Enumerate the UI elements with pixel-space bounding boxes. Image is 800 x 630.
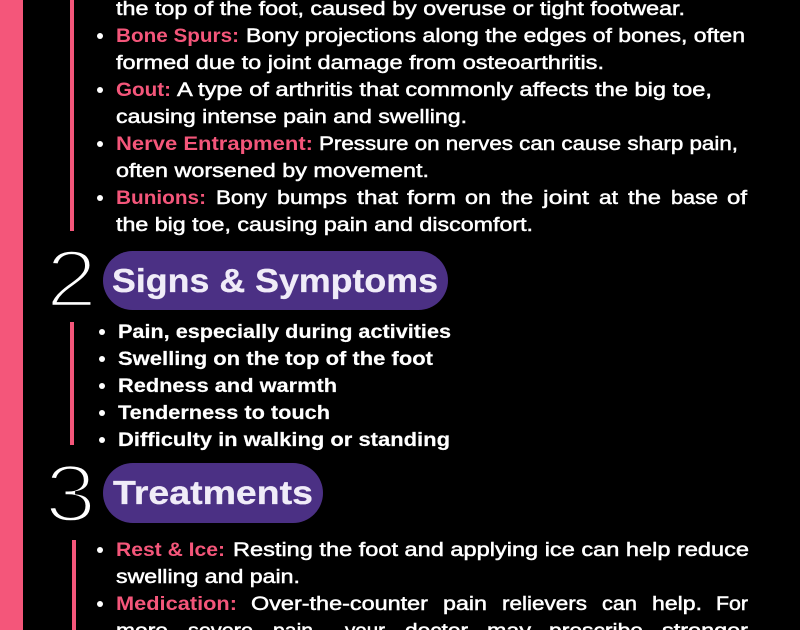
list item: bunions: joint [542, 187, 590, 209]
list item: swelling: Swelling on the top of the foot [118, 348, 434, 370]
list item: rest and ice: swelling and pain. [116, 566, 300, 588]
list item: difficulty walking: Difficulty in walking or standing [118, 429, 450, 451]
heading pill [103, 251, 448, 310]
list item: bunions: the [628, 187, 661, 209]
list item: bunions: of [727, 187, 748, 209]
list item: gout: causing intense pain and swelling. [116, 106, 467, 128]
list item: bunions: at [599, 187, 619, 209]
list item: rest and ice: Rest & Ice: [116, 539, 225, 561]
list item: medication: Over-the-counter [251, 593, 429, 615]
list item: bone spurs: formed due to joint damage from osteoarthritis. [116, 52, 604, 74]
list item: bunions: bumps [277, 187, 347, 209]
list item: pain: Pain, especially during activities [118, 321, 451, 343]
list item: bunions: the [501, 187, 533, 209]
list item: rest and ice: Resting the foot and applying ice can help reduce [233, 539, 749, 561]
list item: medication: can [602, 593, 637, 615]
heading text: Signs & Symptoms [112, 262, 438, 299]
list item: nerve entrapment: often worsened by movement. [116, 160, 429, 182]
list item: medication: For [716, 593, 749, 615]
panel: causes list [70, 0, 748, 236]
list item: nerve entrapment: Nerve Entrapment: [116, 133, 313, 155]
list item: bone spurs: Bony projections along the edges of bones, often [246, 25, 745, 47]
list item: rest and ice [97, 539, 749, 588]
left accent band [0, 0, 23, 630]
number 3: 3 [45, 449, 96, 539]
section heading: signs and symptoms [46, 234, 448, 324]
list item: bunions: Bunions: [116, 187, 206, 209]
list item: bunions: the big toe, causing pain and discomfort. [116, 214, 533, 236]
list item: tenderness: Tenderness to touch [118, 402, 330, 424]
list item: bunions: Bony [216, 187, 267, 209]
heading pill [103, 463, 323, 523]
list item: medication [97, 593, 749, 630]
list item: bone spurs: Bone Spurs: [116, 25, 239, 47]
list item: medication: relievers [502, 593, 587, 615]
list item: bunions [97, 187, 748, 236]
panel: symptoms list [70, 321, 451, 451]
list item: bunions: that [357, 187, 399, 209]
list item: nerve entrapment [97, 133, 738, 182]
causes timeline rail [70, 0, 74, 231]
list item: bunions: form [407, 187, 456, 209]
list item: nerve entrapment: Pressure on nerves can cause sharp pain, [319, 133, 738, 155]
list item: gout: A type of arthritis that commonly affects the big toe, [177, 79, 712, 101]
list item: gout [97, 79, 712, 128]
section heading: treatments [45, 449, 323, 539]
list item: bunions: on [465, 187, 491, 209]
list item: redness: Redness and warmth [118, 375, 337, 397]
list item: gout: Gout: [116, 79, 171, 101]
number 2: 2 [46, 234, 97, 324]
heading text: Treatments [113, 474, 313, 511]
list item: medication: Medication: [116, 593, 237, 615]
list item: medication: help. [652, 593, 702, 615]
panel: treatments list [72, 539, 749, 630]
list item: bone spurs [97, 25, 745, 74]
list item: bunions: base [671, 187, 718, 209]
list item: medication: pain [443, 593, 487, 615]
treatments timeline rail [72, 540, 76, 630]
symptoms timeline rail [70, 322, 74, 445]
